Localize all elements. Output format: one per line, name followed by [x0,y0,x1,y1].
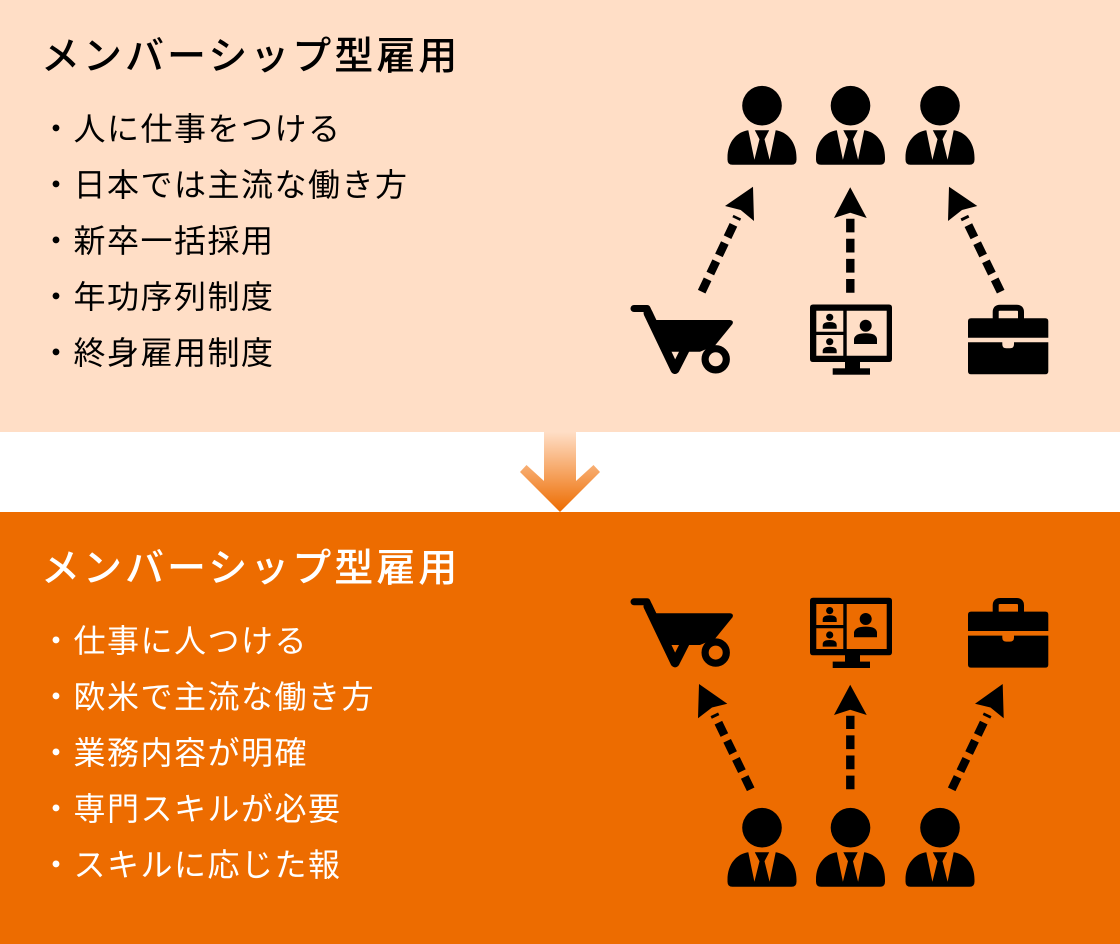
icon: briefcase top [968,308,1048,374]
text block: bottom list: ・専門スキルが必要 [40,791,342,827]
icon: wheelbarrow top [634,308,733,370]
heading: bottom: メンバーシップ型雇用 [41,548,460,590]
icon: video call monitor top [810,304,892,375]
arrow: person to monitor [834,685,867,789]
icon: wheelbarrow bottom [634,602,733,663]
text block: bottom list [40,623,375,883]
arrow: briefcase to person [948,187,1001,292]
arrow: transition down [520,432,600,512]
arrow: cart to person [702,187,754,292]
arrow: monitor to person [834,187,867,293]
arrow: person to briefcase [952,684,1004,789]
text block: top list: ・新卒一括採用 [40,223,275,259]
text block: top list [40,111,409,371]
icon: video call monitor bottom [810,598,892,668]
text block: top list: ・年功序列制度 [40,279,275,315]
arrow: person to cart [698,684,751,789]
icon: briefcase bottom [968,601,1048,668]
icon: three people top [728,86,974,165]
text block: bottom list: ・仕事に人つける [40,623,308,659]
text block: top list: ・人に仕事をつける [40,111,342,147]
heading: top: メンバーシップ型雇用 [41,36,460,78]
icon: three people bottom [728,808,974,887]
panel: bottom job employment [0,512,1120,944]
text block: top list: ・日本では主流な働き方 [40,167,409,203]
text block: top list: ・終身雇用制度 [40,335,275,371]
text block: bottom list: ・スキルに応じた報 [40,847,342,883]
panel: top membership employment [0,0,1120,432]
text block: bottom list: ・業務内容が明確 [40,735,308,771]
text block: bottom list: ・欧米で主流な働き方 [40,679,375,715]
